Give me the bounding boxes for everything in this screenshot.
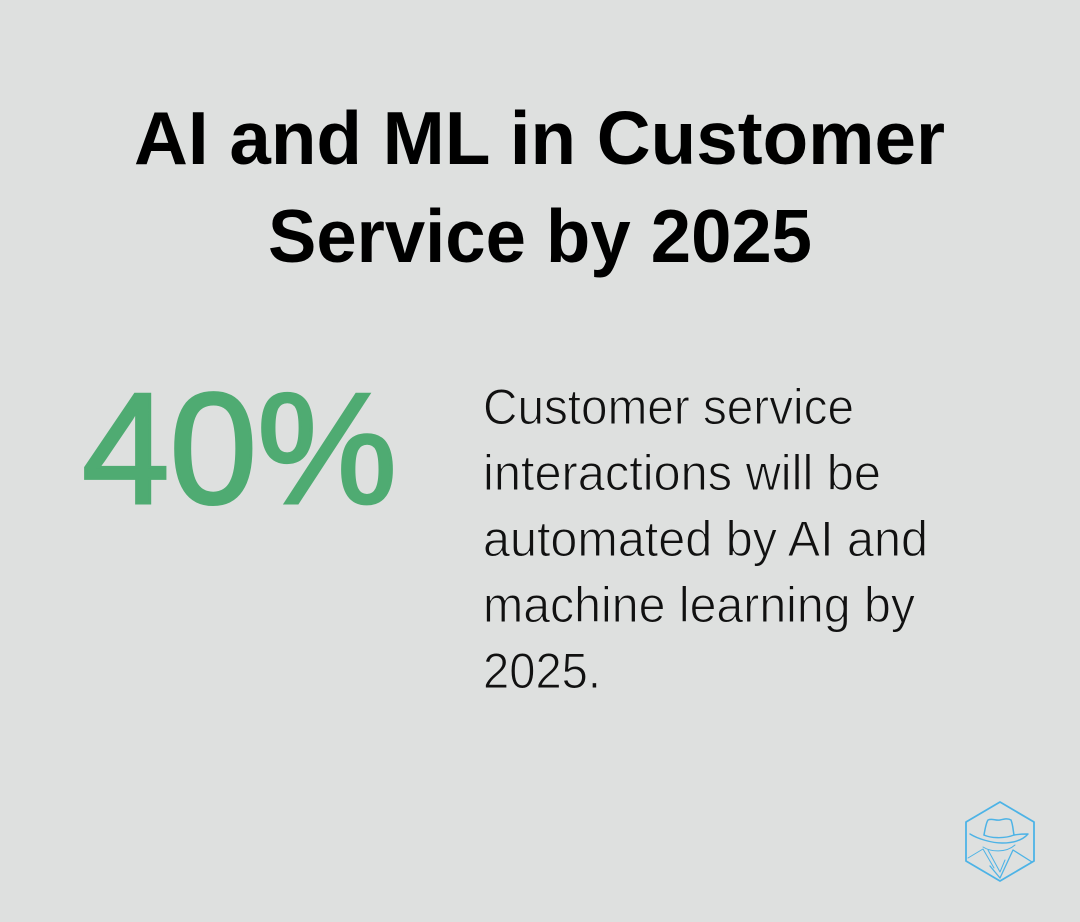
icon: hexagon logo with hat <box>966 802 1034 881</box>
title: Service by 2025 <box>268 194 812 278</box>
title: AI and ML in Customer <box>134 96 945 180</box>
description text: interactions will be <box>483 445 881 501</box>
description text: Customer service <box>483 379 854 435</box>
description text: automated by AI and <box>483 511 928 567</box>
statistic: 40%: 40% <box>82 361 397 537</box>
description text <box>483 379 928 699</box>
description text: 2025. <box>483 643 601 699</box>
title <box>134 96 945 278</box>
description text: machine learning by <box>483 577 915 633</box>
